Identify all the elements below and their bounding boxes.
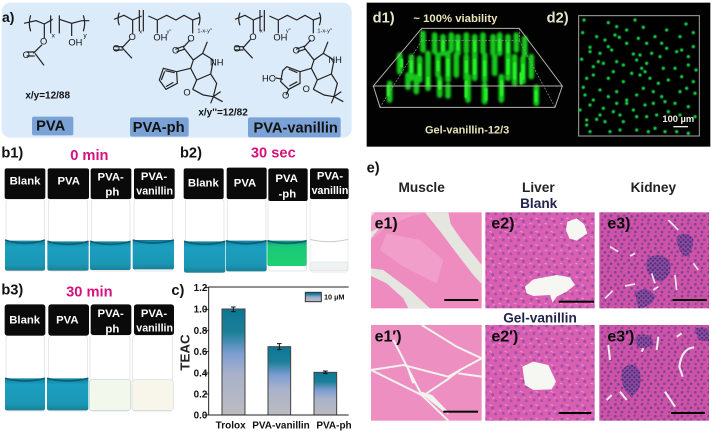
vial: PVA-ph: PVA- bbox=[98, 308, 124, 320]
vial: PVA bbox=[226, 168, 267, 271]
y axis tick labels bbox=[194, 283, 208, 421]
vial: PVA-vanillin: vanillin bbox=[312, 185, 348, 197]
vial: PVA-ph bbox=[89, 304, 131, 411]
structure: PVA-ph: 1-x-y'' bbox=[197, 29, 212, 35]
structure: PVA-ph: O bbox=[172, 45, 179, 55]
panel b3: vials at 30 min bbox=[1, 282, 174, 411]
structure: PVA-ph bbox=[113, 10, 223, 103]
bright cell cores bbox=[388, 40, 536, 101]
column: Liver: Liver bbox=[522, 180, 555, 195]
tag: PVA bbox=[32, 117, 73, 135]
panel e: histology bbox=[367, 161, 709, 421]
label b2: b2) bbox=[180, 145, 202, 161]
vial: PVA-ph: ph bbox=[105, 323, 119, 335]
y axis tick labels: 0.0 bbox=[194, 410, 208, 421]
structure: PVA-vanillin: HO bbox=[262, 73, 276, 83]
legend bbox=[305, 292, 345, 302]
structure: PVA: x bbox=[52, 32, 56, 39]
x axis labels bbox=[216, 420, 352, 431]
vial: PVA-ph: ph bbox=[105, 186, 119, 198]
e3: kidney blank bbox=[599, 212, 709, 308]
axes frame bbox=[204, 287, 349, 415]
vial: Blank: Blank bbox=[10, 176, 41, 188]
y axis tick labels: 1.2 bbox=[194, 283, 208, 294]
vial: PVA-vanillin: PVA- bbox=[317, 170, 343, 182]
vial: PVA: PVA bbox=[56, 315, 79, 327]
x axis labels: Trolox bbox=[216, 420, 246, 431]
scale bar: 100 µm: 100 µm bbox=[662, 114, 694, 124]
vial: PVA-vanillin bbox=[132, 304, 174, 411]
structure: PVA-ph: O bbox=[129, 32, 136, 42]
vial: PVA-ph bbox=[90, 168, 131, 271]
e2: liver blank bbox=[485, 212, 595, 308]
vial: PVA bbox=[47, 168, 89, 271]
vial: PVA-vanillin bbox=[310, 168, 349, 272]
e1: muscle blank bbox=[371, 212, 482, 308]
y axis tick labels: 0.8 bbox=[194, 326, 208, 337]
panel d: confocal images bbox=[367, 3, 710, 147]
structure: PVA-vanillin: O bbox=[308, 33, 315, 43]
vial: PVA-vanillin: vanillin bbox=[136, 323, 173, 335]
vial: PVA bbox=[47, 304, 89, 411]
structure: PVA-vanillin: x bbox=[260, 29, 263, 35]
ratio: x/y'': x/y''=12/82 bbox=[198, 107, 248, 118]
y axis tick labels: 0.4 bbox=[194, 368, 208, 379]
structure: PVA: O bbox=[40, 37, 47, 47]
structure: PVA: O bbox=[23, 50, 30, 60]
vial: PVA-ph: PVA bbox=[275, 173, 298, 185]
vial: PVA: PVA bbox=[57, 176, 80, 188]
vial: Blank: Blank bbox=[188, 178, 219, 190]
panel a label: a) bbox=[2, 9, 14, 25]
bar: PVA-ph bbox=[314, 372, 337, 415]
structure: PVA-vanillin: NH bbox=[328, 55, 342, 65]
x axis labels: PVA-vanillin bbox=[252, 420, 310, 431]
time: 30 min: 30 min bbox=[66, 284, 113, 300]
legend: 10 µM bbox=[324, 293, 345, 302]
structure: PVA-ph: O bbox=[187, 33, 195, 43]
e2': liver gel-vanillin: e2′) bbox=[491, 328, 518, 345]
panel b1: vials at 0 min bbox=[1, 145, 175, 271]
vial: Blank bbox=[5, 304, 45, 411]
panel a background bbox=[2, 3, 352, 138]
bar: PVA-vanillin bbox=[268, 347, 291, 415]
label c: c) bbox=[171, 283, 184, 299]
structure: PVA-vanillin: 1-x-y'' bbox=[317, 29, 332, 35]
e2: liver blank: e2) bbox=[491, 216, 514, 233]
time: 0 min: 0 min bbox=[70, 148, 109, 164]
vial: PVA: PVA bbox=[234, 178, 256, 190]
label b1: b1) bbox=[1, 145, 23, 161]
vial: Blank: Blank bbox=[9, 315, 41, 327]
vial: Blank bbox=[184, 168, 225, 273]
vial: PVA-ph: -ph bbox=[279, 188, 296, 200]
time: 30 sec: 30 sec bbox=[251, 145, 296, 161]
vial: PVA-ph: PVA- bbox=[98, 172, 124, 184]
structure: PVA-ph: O bbox=[113, 44, 120, 54]
structure: PVA-vanillin: O bbox=[249, 32, 257, 42]
structure: PVA-vanillin: y'' bbox=[286, 29, 291, 35]
structure: PVA-ph: x bbox=[139, 29, 142, 35]
column: Muscle: Muscle bbox=[399, 180, 445, 195]
panel b2: vials at 30 sec bbox=[180, 145, 349, 273]
y axis tick labels: 0.6 bbox=[194, 347, 208, 358]
label e: e) bbox=[367, 161, 380, 177]
structure: PVA-vanillin: OH bbox=[273, 33, 287, 43]
e2': liver gel-vanillin bbox=[485, 325, 595, 421]
ratio: x/y: x/y=12/88 bbox=[25, 90, 70, 101]
bar: Trolox bbox=[222, 309, 245, 415]
e3': kidney gel-vanillin bbox=[599, 325, 709, 421]
tag: PVA-vanillin: PVA-vanillin bbox=[253, 121, 338, 137]
label d1: d1) bbox=[373, 11, 395, 27]
green cell dots bbox=[580, 20, 696, 133]
structure: PVA-vanillin: O bbox=[282, 91, 289, 101]
e1': muscle gel-vanillin: e1′) bbox=[375, 328, 402, 345]
structure: PVA-vanillin: O bbox=[233, 44, 241, 54]
structure: PVA-ph: y'' bbox=[167, 29, 171, 35]
e3': kidney gel-vanillin: e3′) bbox=[607, 328, 634, 345]
label d2: d2) bbox=[547, 11, 569, 27]
vial: Blank bbox=[5, 168, 45, 271]
panel a: polymer structures bbox=[2, 3, 352, 138]
y axis tick labels: 0.2 bbox=[194, 389, 208, 400]
vial: PVA-vanillin bbox=[133, 168, 175, 271]
structure: PVA-ph: OH bbox=[153, 33, 167, 43]
structure: PVA: y bbox=[83, 32, 87, 39]
vial: PVA-vanillin: PVA- bbox=[141, 308, 167, 320]
structure: PVA-vanillin: O bbox=[303, 84, 310, 94]
structure: PVA-vanillin: O bbox=[293, 45, 300, 55]
structure: PVA-ph: NH bbox=[210, 58, 223, 68]
e1': muscle gel-vanillin bbox=[371, 325, 482, 421]
vial: PVA-vanillin: PVA- bbox=[141, 171, 167, 183]
label b3: b3) bbox=[1, 282, 23, 298]
row title: Gel-vanillin: Gel-vanillin bbox=[503, 311, 577, 326]
tag: PVA-ph: PVA-ph bbox=[133, 120, 185, 136]
structure: PVA bbox=[23, 15, 89, 65]
column: Kidney: Kidney bbox=[631, 180, 676, 195]
sample name: Gel-vanillin-12/3 bbox=[425, 124, 509, 136]
panel c: TEAC bar chart bbox=[171, 283, 352, 431]
e3: kidney blank: e3) bbox=[607, 216, 630, 233]
d1: 3D cell viability bbox=[373, 28, 562, 107]
viability note: ~ 100% viability bbox=[413, 13, 498, 25]
d2: fluorescence image bbox=[579, 16, 699, 136]
structure: PVA: OH bbox=[68, 38, 82, 48]
x axis labels: PVA-ph bbox=[316, 420, 352, 431]
row title: Blank: Blank bbox=[520, 196, 558, 211]
structure: PVA-vanillin bbox=[233, 10, 343, 103]
3D box outline bbox=[373, 28, 562, 107]
black background bbox=[367, 3, 710, 147]
structure: PVA-ph: O bbox=[183, 88, 191, 98]
tag: PVA: PVA bbox=[36, 119, 66, 135]
error bars bbox=[231, 307, 328, 374]
y axis tick labels: 1.0 bbox=[194, 305, 208, 316]
e1: muscle blank: e1) bbox=[375, 216, 398, 233]
vial: PVA-vanillin: vanillin bbox=[136, 186, 173, 198]
vial: PVA-ph bbox=[267, 168, 308, 271]
green cell streaks bbox=[390, 33, 536, 103]
y axis title: TEAC bbox=[177, 334, 192, 371]
